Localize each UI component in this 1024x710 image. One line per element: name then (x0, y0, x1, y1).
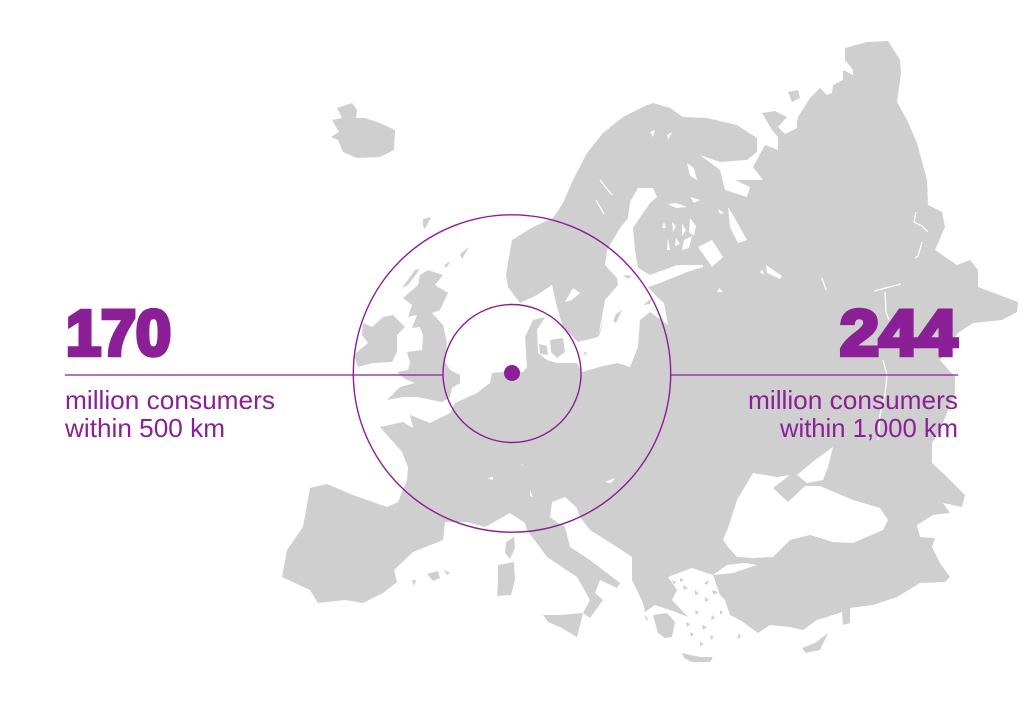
Kolguev Island (788, 90, 800, 102)
mainland Europe (282, 41, 1018, 633)
Sicily (543, 613, 583, 637)
Great Britain (387, 270, 460, 402)
left statistic (64, 297, 275, 443)
Iceland (331, 103, 395, 158)
Rybinsk reservoir (717, 265, 782, 292)
Cyprus (802, 633, 828, 653)
Corsica (505, 537, 515, 559)
caption line 2: within 500 km (64, 413, 225, 443)
Lake Onega (728, 207, 747, 243)
origin dot (504, 365, 520, 381)
Sardinia (497, 562, 515, 596)
seas and lakes (487, 130, 928, 575)
rivers (596, 180, 928, 440)
caption line 1: million consumers (65, 385, 275, 415)
Central European lakes (487, 463, 615, 497)
1,000 km ring (353, 215, 671, 532)
Kama river (914, 212, 928, 232)
Ireland (354, 315, 405, 367)
Volga river (822, 242, 922, 320)
Lake Vanern (565, 288, 580, 302)
Nordic and North Sea islands (402, 217, 469, 288)
Lake Ladoga (698, 240, 723, 267)
left connector line (65, 374, 443, 376)
Sea of Marmara (713, 563, 757, 575)
Baltic islands (584, 275, 652, 356)
caption line 2: within 1,000 km (779, 413, 958, 443)
right statistic (748, 297, 958, 443)
Karelian and Finnish lakes (650, 130, 724, 250)
Black Sea (723, 473, 888, 558)
number 244: 244 (840, 297, 957, 369)
number 170: 170 (66, 297, 171, 369)
500 km ring (443, 304, 581, 442)
caption line 1: million consumers (748, 385, 958, 415)
Aegean islands (645, 578, 741, 646)
Sea of Azov (797, 447, 833, 483)
Danish islands (539, 338, 565, 358)
Crete (682, 653, 713, 662)
Don river (878, 360, 887, 440)
Peloponnese (653, 613, 675, 638)
map of Europe (282, 41, 1018, 662)
Swedish mountain streams (596, 180, 612, 214)
Balearic Islands (412, 570, 450, 586)
distance rings (353, 215, 671, 532)
right connector line (670, 374, 958, 376)
